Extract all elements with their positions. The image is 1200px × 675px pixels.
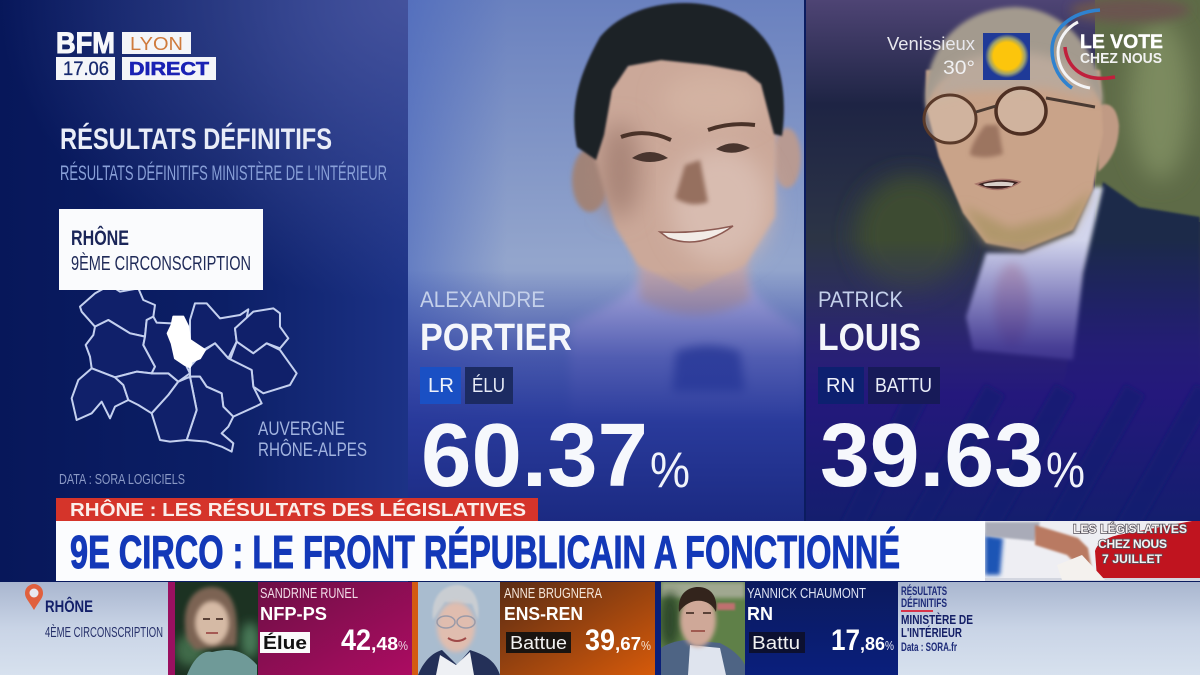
party tag: LR élu: ÉLU bbox=[472, 374, 505, 397]
logo: BFM Lyon direct: 17.06 bbox=[63, 59, 109, 80]
candidate name: ALEXANDRE bbox=[420, 287, 545, 312]
icon: sun bbox=[985, 34, 1029, 78]
panel: Patrick Louis: LOUIS bbox=[818, 317, 921, 359]
panel: Alexandre Portier: PORTIER bbox=[420, 317, 572, 359]
label box: Rhône 9ème circonscription: RHÔNE bbox=[71, 226, 129, 250]
ticker card: Sandrine Runel: Élue bbox=[263, 632, 307, 653]
party tag: RN battu: RN bbox=[826, 375, 855, 397]
ticker card: Sandrine Runel: NFP-PS bbox=[260, 604, 327, 624]
party tag: RN battu bbox=[818, 367, 940, 404]
label box: Rhône 9ème circonscription bbox=[59, 209, 263, 290]
party tag: LR élu: LR bbox=[428, 375, 454, 397]
candidate name: PATRICK bbox=[818, 287, 903, 312]
subheading: source: RÉSULTATS DÉFINITIFS MINISTÈRE DE L'INTÉRIEUR bbox=[60, 162, 387, 185]
decorative diagonal stripes bbox=[868, 385, 1200, 478]
photo: Yannick Chaumont bbox=[660, 582, 745, 675]
ticker: constituency label bbox=[25, 584, 163, 641]
ticker: constituency label: RHÔNE bbox=[45, 597, 93, 616]
map region label: AUVERGNE bbox=[258, 419, 345, 440]
label box: Rhône 9ème circonscription: 9ÈME CIRCONSCRIPTION bbox=[71, 252, 251, 275]
party tag: RN battu: BATTU bbox=[875, 375, 932, 397]
ticker card: Sandrine Runel bbox=[168, 582, 412, 675]
score: 39.63%: 39.63 bbox=[820, 406, 1044, 506]
photo: Sandrine Runel bbox=[175, 582, 259, 675]
party tag: LR élu bbox=[420, 367, 513, 404]
ticker card: Anne Brugnera bbox=[412, 582, 655, 675]
icon: location pin bbox=[25, 584, 43, 610]
portrait: Patrick Louis bbox=[855, 0, 1200, 521]
panel: Alexandre Portier bbox=[408, 0, 804, 521]
ticker card: Sandrine Runel: SANDRINE RUNEL bbox=[260, 585, 358, 602]
thumbnail: les législatives 7 juillet bbox=[985, 521, 1200, 581]
ticker card: Anne Brugnera: % bbox=[641, 638, 651, 653]
banner tag: Rhône les résultats: RHÔNE : LES RÉSULTATS DES LÉGISLATIVES bbox=[70, 499, 526, 520]
logo: BFM Lyon direct bbox=[56, 27, 216, 80]
map: Auvergne-Rhône-Alpes departments bbox=[72, 285, 297, 452]
ticker card: Yannick Chaumont: ,86 bbox=[860, 634, 885, 654]
ticker: source note: L'INTÉRIEUR bbox=[901, 625, 962, 640]
heading: results: RÉSULTATS DÉFINITIFS bbox=[60, 122, 332, 156]
logo: BFM Lyon direct: DIRECT bbox=[129, 59, 209, 79]
photo: Anne Brugnera bbox=[418, 582, 500, 675]
ticker card: Sandrine Runel: % bbox=[398, 638, 408, 653]
ticker card: Yannick Chaumont: YANNICK CHAUMONT bbox=[747, 585, 866, 602]
thumbnail: les législatives 7 juillet: 7 JUILLET bbox=[1102, 552, 1163, 566]
ticker: source note: DÉFINITIFS bbox=[901, 595, 947, 610]
panel: Patrick Louis bbox=[806, 0, 1200, 530]
ticker card: Yannick Chaumont bbox=[655, 582, 898, 675]
portrait: Alexandre Portier bbox=[570, 3, 804, 420]
ticker card: Sandrine Runel: ,48 bbox=[371, 634, 398, 654]
weather widget: Venissieux 30°: Venissieux bbox=[887, 34, 975, 54]
score: 60.37%: % bbox=[650, 442, 690, 498]
map highlight: Rhône department bbox=[168, 317, 205, 367]
background panel: left results column bbox=[0, 0, 408, 582]
ticker card: Anne Brugnera: ENS-REN bbox=[504, 604, 583, 624]
ticker card: Anne Brugnera: ANNE BRUGNERA bbox=[504, 585, 602, 602]
ticker card: Yannick Chaumont: % bbox=[885, 638, 894, 653]
thumbnail: les législatives 7 juillet: CHEZ NOUS bbox=[1098, 537, 1167, 551]
thumbnail: les législatives 7 juillet: LES LÉGISLATIVES bbox=[1073, 521, 1187, 536]
logo: BFM Lyon direct: LYON bbox=[130, 34, 183, 54]
score: 39.63%: % bbox=[1046, 442, 1085, 498]
ticker card: Yannick Chaumont: Battu bbox=[752, 633, 800, 653]
logo: Le vote chez nous bbox=[1052, 10, 1163, 88]
ticker card: Anne Brugnera: Battue bbox=[510, 633, 567, 653]
logo: Le vote chez nous: CHEZ NOUS bbox=[1080, 50, 1162, 67]
map region label: RHÔNE-ALPES bbox=[258, 439, 367, 461]
ticker card: Yannick Chaumont: RN bbox=[747, 604, 773, 624]
ticker card: Sandrine Runel: 42 bbox=[341, 624, 371, 657]
ticker strip background bbox=[0, 582, 1200, 675]
ticker: source note: Data : SORA.fr bbox=[901, 640, 957, 654]
ticker: source note: RÉSULTATS bbox=[901, 583, 947, 598]
ticker: source note bbox=[901, 583, 973, 654]
ticker: source note: MINISTÈRE DE bbox=[901, 612, 973, 627]
weather widget: Venissieux 30° bbox=[887, 33, 1030, 80]
ticker: constituency label: 4ÈME CIRCONSCRIPTION bbox=[45, 624, 163, 641]
data source: DATA : SORA LOGICIELS bbox=[59, 471, 185, 488]
ticker card: Anne Brugnera: ,67 bbox=[615, 634, 641, 654]
ticker card: Yannick Chaumont: 17 bbox=[831, 624, 860, 657]
ticker card: Anne Brugnera: 39 bbox=[585, 624, 615, 657]
score: 60.37%: 60.37 bbox=[421, 406, 648, 506]
map region label bbox=[258, 419, 367, 461]
weather widget: Venissieux 30°: 30° bbox=[943, 58, 975, 79]
logo: Le vote chez nous: LE VOTE bbox=[1080, 32, 1163, 53]
logo: BFM Lyon direct: BFM bbox=[56, 27, 115, 60]
